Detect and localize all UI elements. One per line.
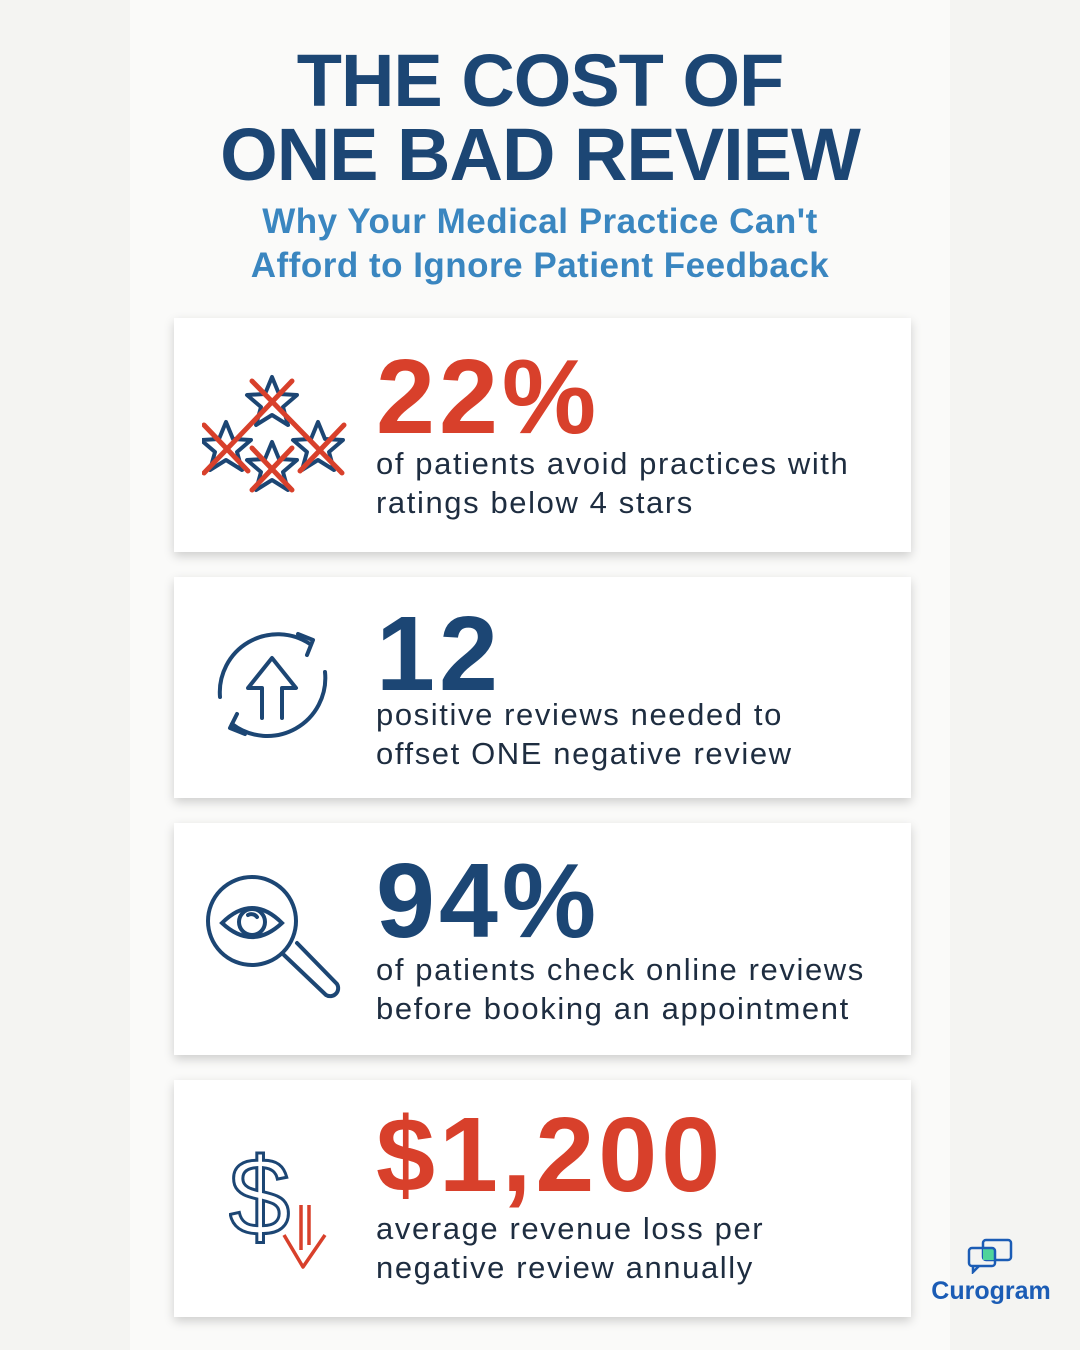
stat text: of patients avoid practices with [376,446,849,481]
stat text [376,446,849,520]
stat text: positive reviews needed to [376,697,783,732]
title: ONE BAD REVIEW [220,113,860,196]
card: 22% [174,318,911,552]
card: 94% [174,823,911,1055]
stat text: before booking an appointment [376,991,850,1026]
icon: dollar down arrow: $ [229,1136,290,1259]
stat number: $1,200 [376,1096,724,1214]
subtitle: Afford to Ignore Patient Feedback [251,246,829,285]
title [220,39,861,196]
icon: magnifier eye [206,875,340,998]
stat text: average revenue loss per [376,1211,764,1246]
stat text: offset ONE negative review [376,736,793,771]
icon: crossed stars [202,374,346,492]
card: $1,200 [174,1080,911,1317]
stat text: negative review annually [376,1250,754,1285]
stat text [376,1211,764,1285]
stat number: 94% [376,842,600,960]
subtitle [251,202,829,285]
stat text [376,952,865,1026]
stat number: 22% [376,338,600,456]
stat text: of patients check online reviews [376,952,865,987]
icon: circular arrows up [218,632,328,738]
icon: dollar down arrow [229,1136,326,1269]
stat text: ratings below 4 stars [376,485,694,520]
card: 12 [174,577,911,798]
stat text [376,697,793,771]
subtitle: Why Your Medical Practice Can't [262,202,818,241]
logo: Curogram [931,1238,1051,1305]
stat number: 12 [376,595,502,713]
logo: Curogram: Curogram [931,1277,1051,1305]
title: THE COST OF [297,39,783,122]
